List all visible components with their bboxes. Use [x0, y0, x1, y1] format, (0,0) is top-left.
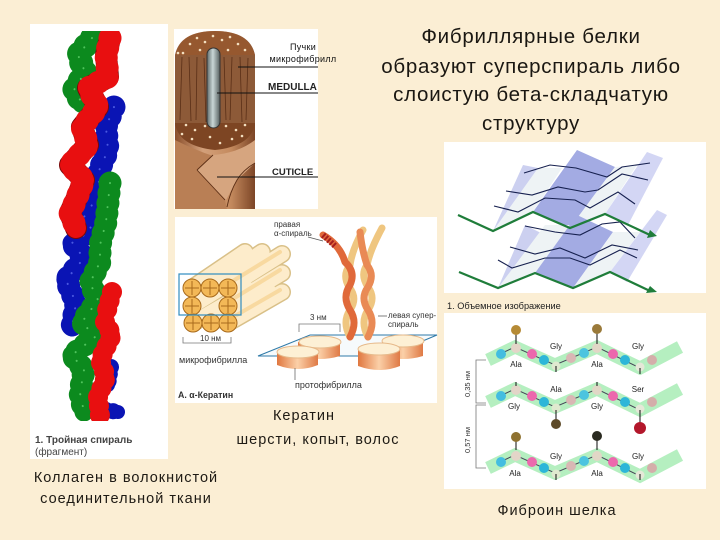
10 nm bracket — [183, 337, 231, 343]
residue labels — [508, 342, 645, 478]
residue labels: Gly — [508, 402, 520, 411]
title: Фибриллярные белки — [421, 25, 641, 48]
panel: keratin diagram — [175, 217, 437, 403]
title — [381, 25, 681, 135]
hair labels: Пучки — [290, 42, 316, 52]
panel: hair cross-section — [174, 29, 336, 209]
caption: keratin: Кератин — [273, 408, 335, 424]
striated cortex — [175, 55, 255, 123]
residue labels: Ser — [632, 385, 645, 394]
panel: keratin diagram: микрофибрилла — [179, 355, 247, 365]
panel: keratin diagram: протофибрилла — [295, 380, 362, 390]
top cap — [175, 31, 255, 56]
residue labels: Gly — [591, 402, 603, 411]
microfibril bundles dots — [177, 35, 246, 144]
residue labels: Gly — [632, 452, 644, 461]
chain rows — [488, 343, 680, 372]
panel: keratin diagram: 3 нм — [310, 313, 327, 322]
panel: keratin diagram: α-спираль — [274, 229, 312, 238]
panel: collagen triple helix — [30, 24, 168, 459]
residue labels: Gly — [550, 452, 562, 461]
panel: silk fibroin structure: 0,35 нм — [463, 371, 472, 397]
panel: collagen triple helix: (фрагмент) — [35, 446, 87, 458]
helix caption: 1. Тройная спираль — [35, 435, 132, 446]
keratin labels: правая — [274, 220, 300, 229]
panel: keratin diagram: левая супер- — [388, 311, 437, 320]
residue labels: Ala — [509, 469, 521, 478]
upper sheet — [493, 150, 663, 231]
caption: keratin: шерсти, копыт, волос — [237, 432, 399, 448]
residue labels: Gly — [550, 342, 562, 351]
panel: silk fibroin structure — [444, 313, 706, 489]
cuticle scales — [175, 140, 255, 209]
caption: collagen: Коллаген в волокнистой — [34, 470, 218, 486]
title: слоистую бета-складчатую — [393, 83, 669, 106]
lower sheet — [498, 210, 667, 288]
panel: silk fibroin structure: 0,57 нм — [463, 427, 472, 453]
3 nm bracket — [299, 324, 340, 332]
residue labels: Ala — [550, 385, 562, 394]
panel: hair cross-section: микрофибрилл — [270, 54, 336, 64]
leader lines — [217, 67, 318, 177]
beta sheet caption: 1. Объемное изображение — [447, 301, 561, 311]
residue labels: Ala — [591, 469, 603, 478]
side chains — [516, 330, 640, 480]
distance brackets — [476, 360, 486, 468]
bottom cap — [175, 123, 255, 150]
protofibril plane — [258, 335, 437, 356]
protofibril cylinders — [277, 335, 424, 370]
caption: collagen — [34, 470, 218, 507]
blue selection frame — [179, 274, 241, 315]
title: структуру — [482, 112, 580, 135]
panel: hair cross-section: CUTICLE — [272, 167, 313, 178]
panel: keratin diagram: спираль — [388, 320, 419, 329]
microfibril cylinders — [192, 252, 282, 323]
panel: keratin diagram: А. α-Кератин — [178, 390, 233, 400]
cross-section circles — [183, 279, 237, 332]
green strand arrows — [458, 212, 650, 291]
helix strands — [66, 38, 118, 416]
medulla — [207, 48, 220, 128]
title: образуют суперспираль либо — [381, 55, 681, 78]
panel: hair cross-section: MEDULLA — [268, 82, 317, 93]
caption: keratin — [237, 408, 399, 448]
backbones — [494, 163, 650, 268]
panel: beta sheet 3D — [444, 142, 706, 293]
hair shaft — [175, 31, 255, 209]
caption: fibroin: Фиброин шелка — [497, 503, 617, 519]
residue labels: Ala — [591, 360, 603, 369]
residue labels: Ala — [510, 360, 522, 369]
coiled-coil ropes — [323, 228, 382, 337]
residue labels: Gly — [632, 342, 644, 351]
panel: keratin diagram: 10 нм — [200, 334, 221, 343]
caption: collagen: соединительной ткани — [40, 491, 212, 507]
